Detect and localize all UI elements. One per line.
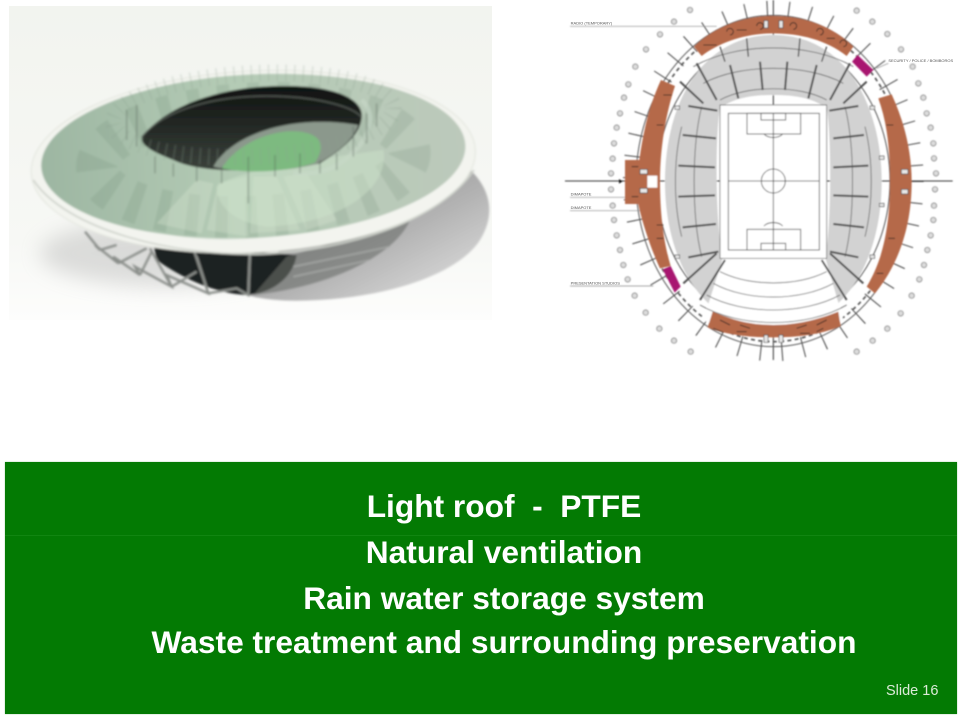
callout labels: RADIO (TEMPORARY) bbox=[571, 21, 613, 26]
brown west block bbox=[625, 80, 675, 268]
outer rim posts bbox=[111, 66, 395, 164]
white roof ring bbox=[27, 59, 480, 264]
slide number: Slide 16 bbox=[886, 683, 938, 699]
grid axes bbox=[565, 0, 953, 360]
render background bbox=[9, 6, 492, 320]
stadium floor plan bbox=[565, 0, 953, 360]
ring lower edge bbox=[33, 170, 474, 254]
football pitch bbox=[720, 105, 827, 258]
stadium 3D render bbox=[9, 6, 492, 320]
white south stand cut-out bbox=[703, 257, 843, 330]
ring cover to hide lower posts bbox=[163, 220, 350, 239]
soft ground shadow bbox=[40, 220, 293, 287]
callout labels: DIMAPOTE bbox=[571, 192, 592, 197]
callout labels: DIMAPOTE bbox=[571, 205, 592, 210]
text: waste treatment: Waste treatment and surrounding preservation bbox=[152, 624, 856, 660]
west entrance opening bbox=[647, 176, 657, 188]
dark underside bbox=[153, 243, 297, 295]
faint panel seam bbox=[5, 535, 957, 536]
football pitch bbox=[222, 131, 321, 171]
truss supports bbox=[85, 232, 390, 295]
grid number bubbles bbox=[608, 7, 939, 354]
dark structural beams bbox=[678, 38, 868, 300]
cast shadow on the right bbox=[233, 167, 489, 301]
callout labels bbox=[571, 21, 953, 286]
heading: light roof: Light roof - PTFE bbox=[367, 488, 641, 524]
outer ring lines bbox=[636, 15, 911, 347]
translucent roof glass bbox=[37, 63, 470, 249]
light bays in front bbox=[157, 173, 337, 237]
entrance arrow bbox=[619, 179, 623, 184]
text: rain water storage: Rain water storage system bbox=[303, 580, 705, 616]
callout labels: PRESENTATION STUDIOS bbox=[571, 281, 620, 286]
magenta presentation studio bbox=[663, 266, 681, 293]
brown east block bbox=[867, 94, 912, 293]
stairwell markers bbox=[640, 21, 908, 342]
callout labels: SECURITY / POLICE / BOMBOROS bbox=[888, 58, 953, 63]
grey seating inside opening bbox=[213, 122, 358, 171]
radial gridline spokes bbox=[633, 11, 913, 351]
radial roof bays bbox=[94, 95, 413, 225]
grey seating stands bbox=[665, 35, 882, 328]
inner rim bbox=[142, 96, 362, 137]
roof columns near the opening bbox=[127, 103, 377, 203]
brown south block bbox=[708, 312, 841, 337]
text: natural ventilation: Natural ventilation bbox=[366, 534, 642, 570]
pitch seen through roof bbox=[217, 150, 384, 227]
concentric seating arcs bbox=[675, 48, 871, 322]
callout leader lines bbox=[570, 26, 888, 286]
rim collar bbox=[293, 100, 370, 174]
brown north block bbox=[694, 16, 853, 56]
grey underside on the right bbox=[253, 220, 410, 295]
green text panel bbox=[5, 462, 957, 714]
central opening bbox=[142, 86, 362, 170]
magenta security room bbox=[852, 55, 873, 77]
block details bbox=[632, 23, 895, 333]
